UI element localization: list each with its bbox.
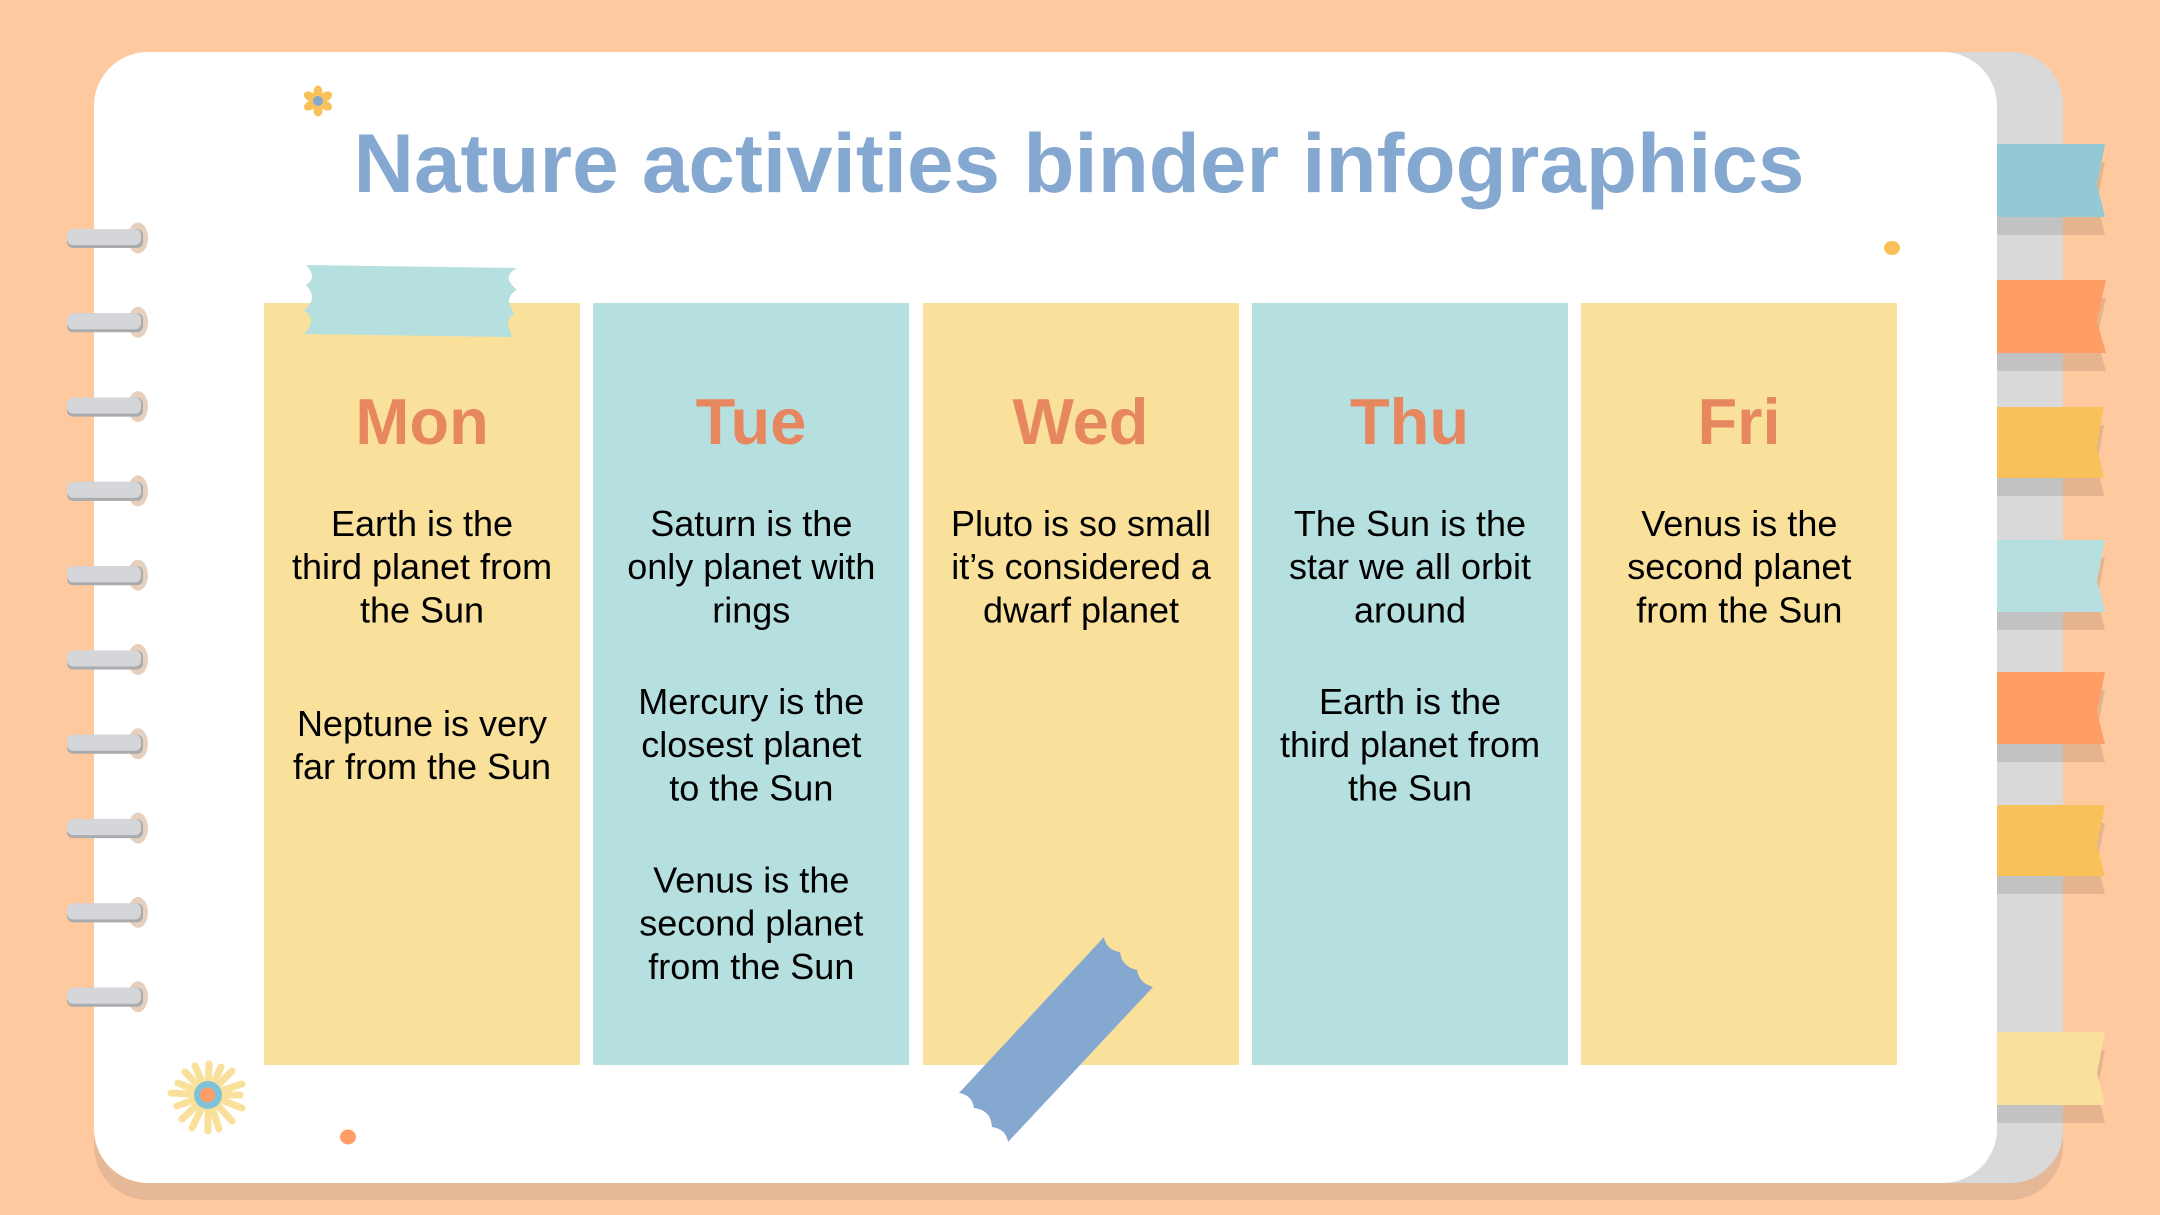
- text: Tue items: to the Sun: [669, 768, 833, 808]
- binder rings: [67, 222, 148, 1012]
- text: Thu items: The Sun is the: [1294, 503, 1526, 544]
- text: Fri items: second planet: [1627, 546, 1851, 587]
- icon: small flower: [302, 86, 334, 116]
- text: Fri items: Venus is the: [1641, 503, 1837, 544]
- panel: Thursday: [1252, 303, 1568, 1065]
- tab: pale yellow: [1997, 1032, 2105, 1105]
- text: Thu items: Earth is the: [1319, 681, 1501, 722]
- ring 4: [67, 475, 148, 506]
- text: Wed items: Pluto is so small: [951, 503, 1211, 544]
- ring 6: [67, 644, 148, 675]
- heading: Mon: Mon: [355, 385, 489, 458]
- tab shadows: [1997, 162, 2106, 1123]
- text: Tue items: from the Sun: [648, 946, 854, 987]
- tab: yellow lower: [1997, 805, 2105, 876]
- panel: Friday: [1581, 303, 1897, 1065]
- text: Tue items: only planet with: [627, 546, 875, 587]
- heading: Tue: Tue: [696, 385, 806, 458]
- text: Mon items: Neptune is very: [297, 703, 547, 744]
- heading: Fri: Fri: [1697, 385, 1781, 458]
- text: Mon items: far from the Sun: [293, 746, 551, 787]
- text: Tue items: second planet: [639, 902, 863, 944]
- text: Wed items: it’s considered a: [951, 546, 1212, 587]
- heading: Wed: Wed: [1012, 385, 1149, 458]
- ring 5: [67, 560, 148, 591]
- tab: yellow: [1997, 407, 2104, 478]
- heading: Thu: Thu: [1350, 385, 1469, 458]
- text: Tue items: [627, 503, 875, 987]
- ring 9: [67, 897, 148, 928]
- text: Mon items: the Sun: [360, 590, 484, 630]
- text: Tue items: rings: [712, 590, 790, 630]
- text: Thu items: third planet from: [1280, 724, 1540, 765]
- text: Tue items: closest planet: [641, 724, 861, 765]
- text: Tue items: Mercury is the: [638, 681, 864, 722]
- text: Wed items: dwarf planet: [983, 590, 1179, 630]
- ring 10: [67, 981, 148, 1012]
- text: Thu items: [1280, 503, 1540, 808]
- text: Fri items: [1627, 503, 1851, 630]
- text: Mon items: third planet from: [292, 546, 552, 587]
- text: Tue items: Venus is the: [653, 860, 849, 900]
- icon: sunburst flower: [171, 1064, 242, 1131]
- ring 1: [67, 222, 148, 254]
- text: Tue items: Saturn is the: [650, 503, 852, 544]
- tab: blue: [1997, 144, 2105, 217]
- washi tape: teal: [304, 265, 517, 337]
- panel: Monday: [264, 303, 580, 1065]
- text: Fri items: from the Sun: [1636, 590, 1842, 630]
- tab: orange: [1997, 280, 2106, 353]
- dot: orange: [340, 1130, 356, 1144]
- ring 7: [67, 728, 148, 759]
- text: Thu items: star we all orbit: [1289, 546, 1531, 587]
- ring 8: [67, 813, 148, 844]
- text: Wed items: [951, 503, 1212, 630]
- ring 3: [67, 391, 148, 422]
- text: Thu items: the Sun: [1348, 768, 1472, 808]
- text: Mon items: [292, 503, 552, 787]
- tab: teal: [1997, 540, 2105, 612]
- ring 2: [67, 307, 148, 338]
- title: Nature activities binder infographics: [354, 116, 1804, 210]
- binder back cover: [1900, 52, 2063, 1183]
- dot: yellow: [1884, 241, 1900, 255]
- text: Thu items: around: [1354, 590, 1466, 630]
- tab: orange lower: [1997, 672, 2105, 744]
- text: Mon items: Earth is the: [331, 503, 513, 544]
- panel: Tuesday: [593, 303, 909, 1065]
- washi tape: blue: [959, 937, 1153, 1142]
- panel: Wednesday: [923, 303, 1239, 1065]
